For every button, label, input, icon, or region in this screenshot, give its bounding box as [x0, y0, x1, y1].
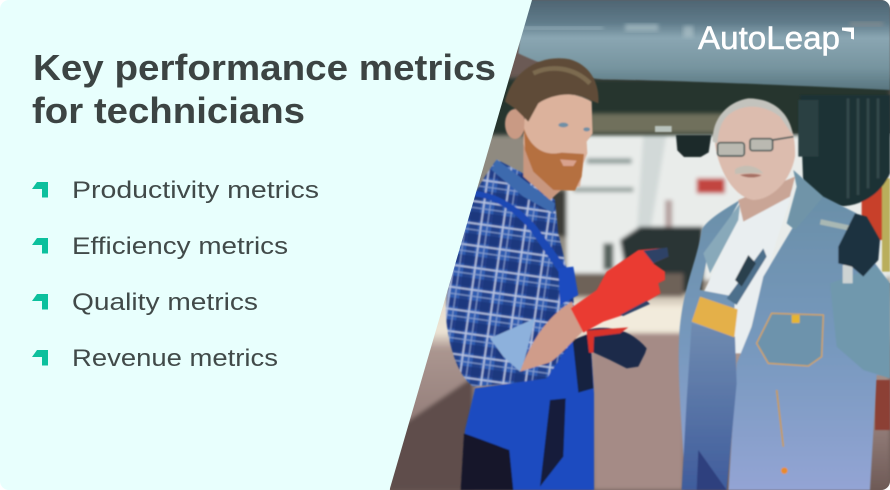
vehicle underbody: [390, 78, 890, 157]
hair: [713, 98, 793, 143]
glasses: [718, 137, 793, 156]
hair: [505, 58, 599, 122]
beard: [524, 128, 584, 191]
forearm: [520, 302, 583, 372]
list: metric categories: [32, 177, 319, 372]
coat: [679, 197, 890, 490]
item: quality metrics: Quality metrics: [72, 289, 258, 316]
technician: younger man with red gloves: [446, 58, 669, 490]
icon: lower dark glove: [587, 328, 647, 368]
title: [32, 54, 494, 124]
item: revenue metrics: Revenue metrics: [72, 345, 278, 372]
title: Key performance metrics: [33, 47, 496, 88]
technician: older man in grey-blue coat: [679, 98, 890, 490]
rolled sleeve: [490, 318, 535, 372]
ear: [505, 109, 525, 139]
overalls strap: [475, 191, 567, 272]
panel: workshop photo with two technicians: [390, 0, 890, 490]
collar: [492, 159, 555, 213]
neck: [738, 177, 795, 222]
vehicle tyre and lift post: [798, 95, 890, 430]
item: productivity metrics: Productivity metrics: [72, 177, 319, 204]
face: [523, 94, 593, 190]
yellow patch: [692, 297, 738, 337]
logo: AutoLeap: AutoLeap: [698, 20, 840, 56]
overalls bib: [682, 323, 737, 490]
neck: [522, 133, 562, 201]
shirt: blue plaid: [446, 159, 577, 387]
vehicle body panel: [518, 0, 890, 91]
white t-shirt: [703, 190, 793, 353]
face: [715, 102, 795, 200]
icon: dark glove with tool: [820, 219, 852, 231]
item: efficiency metrics: Efficiency metrics: [72, 233, 288, 260]
eyes: [558, 123, 568, 127]
photo background: garage: [390, 0, 890, 490]
panel: pale mint text panel: [0, 0, 532, 490]
overalls: blue: [462, 267, 594, 490]
moustache: [735, 166, 763, 174]
overalls strap: [727, 248, 767, 305]
title: for technicians: [32, 90, 305, 131]
coat lower seam: [777, 390, 783, 447]
icon: red glove: [571, 248, 668, 333]
raised sleeve: [832, 290, 890, 379]
coat pocket: [757, 313, 823, 366]
